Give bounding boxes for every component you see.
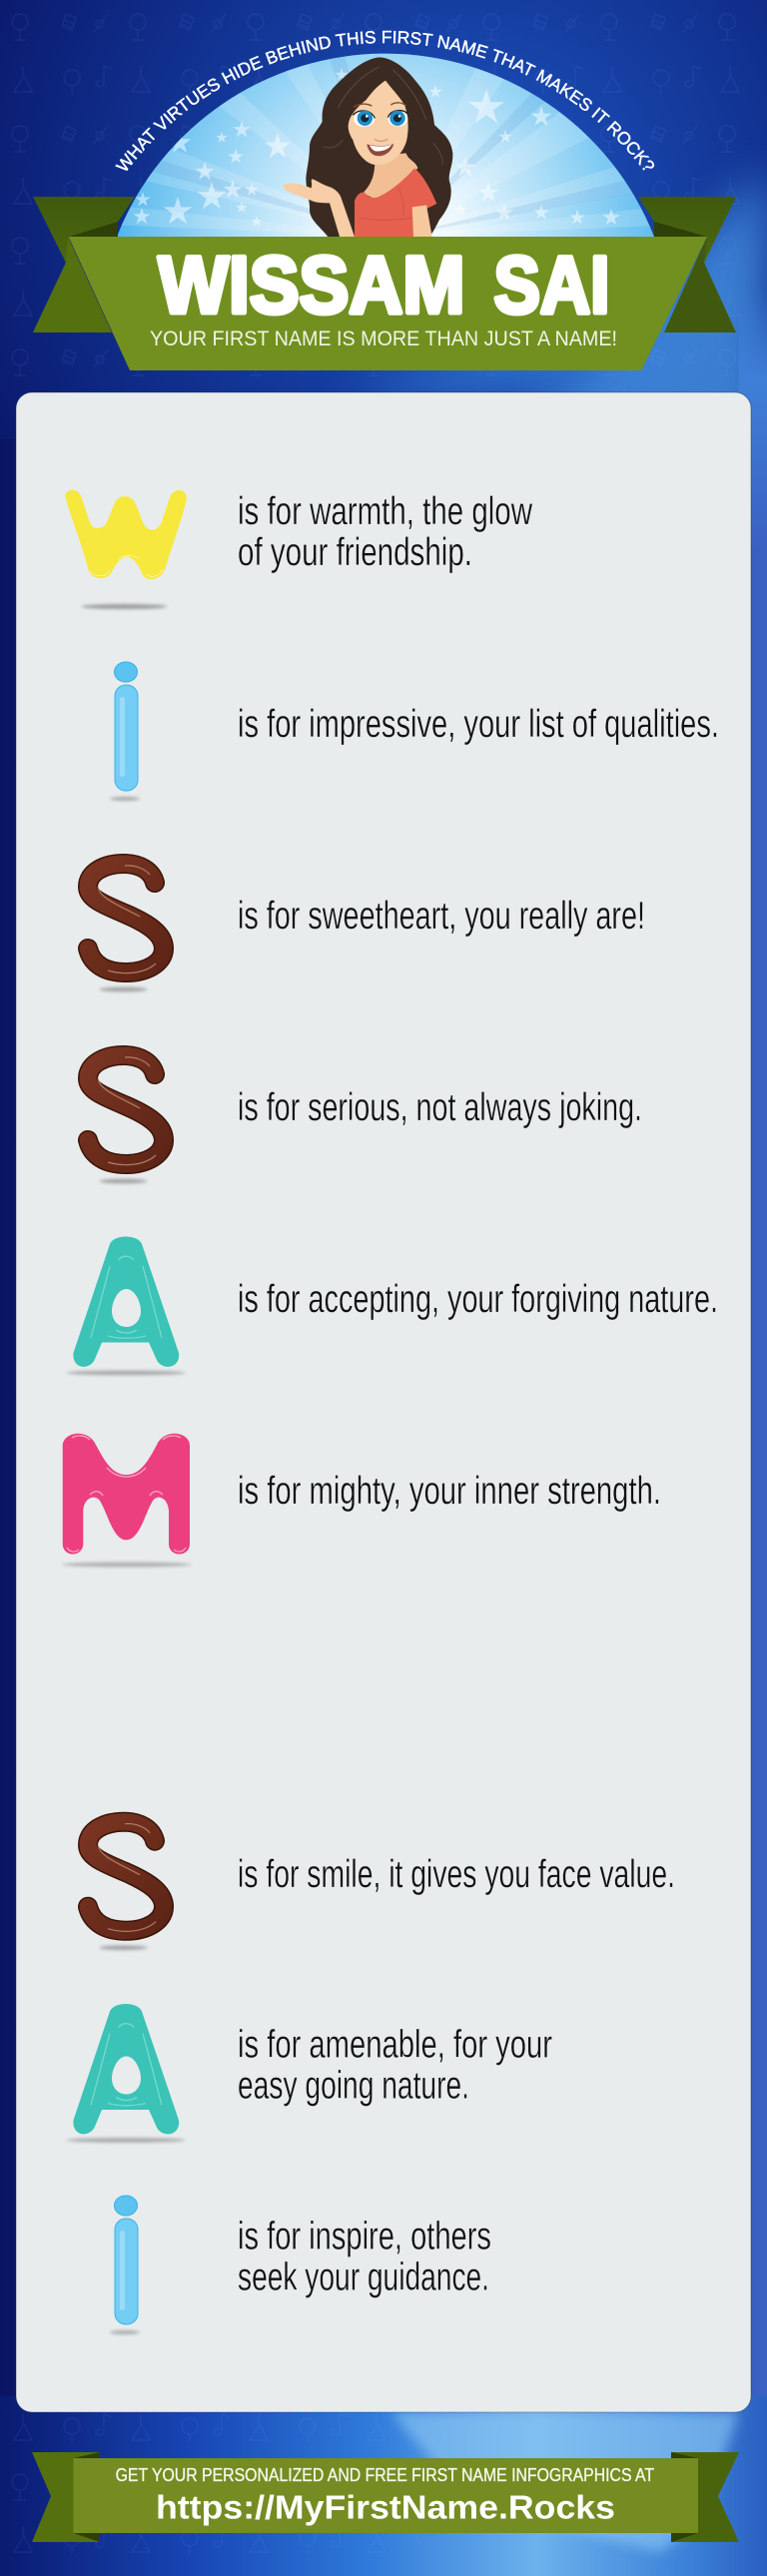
character illustration xyxy=(283,57,452,237)
letter A xyxy=(66,1236,186,1375)
i text xyxy=(238,2215,491,2298)
subtitle: YOUR FIRST NAME IS MORE THAN JUST A NAME! xyxy=(150,327,617,350)
footer call to action: GET YOUR PERSONALIZED AND FREE FIRST NAME INFOGRAPHICS AT xyxy=(116,2464,654,2485)
content panel xyxy=(16,392,751,2412)
footer ribbon tails xyxy=(32,2452,739,2542)
back ribbon right xyxy=(638,197,736,332)
letter W xyxy=(65,490,187,609)
A text: is for amenable, for your xyxy=(238,2023,552,2067)
W text: of your friendship. xyxy=(238,531,472,574)
letter M xyxy=(62,1434,192,1567)
header dome xyxy=(118,54,654,237)
letter S xyxy=(88,1055,164,1183)
i text: seek your guidance. xyxy=(238,2256,489,2298)
A text xyxy=(238,2023,552,2107)
letter S xyxy=(88,864,164,991)
back ribbon left xyxy=(33,197,135,332)
name title: WISSAM xyxy=(158,241,465,330)
W text: is for warmth, the glow xyxy=(238,490,533,533)
front ribbon xyxy=(69,237,707,370)
footer url: https://MyFirstName.Rocks xyxy=(156,2488,615,2526)
name title: SAI xyxy=(493,241,609,330)
curved tagline: WHAT VIRTUES HIDE BEHIND THIS FIRST NAME THAT MAKES IT ROCK? xyxy=(115,30,655,172)
letter S xyxy=(88,1822,164,1950)
letter i xyxy=(110,2196,140,2334)
A text: easy going nature. xyxy=(238,2065,469,2107)
letter A xyxy=(66,2004,186,2143)
W text xyxy=(238,490,533,574)
letter i xyxy=(110,662,140,801)
footer ribbon xyxy=(74,2458,698,2533)
i text: is for inspire, others xyxy=(238,2215,491,2258)
